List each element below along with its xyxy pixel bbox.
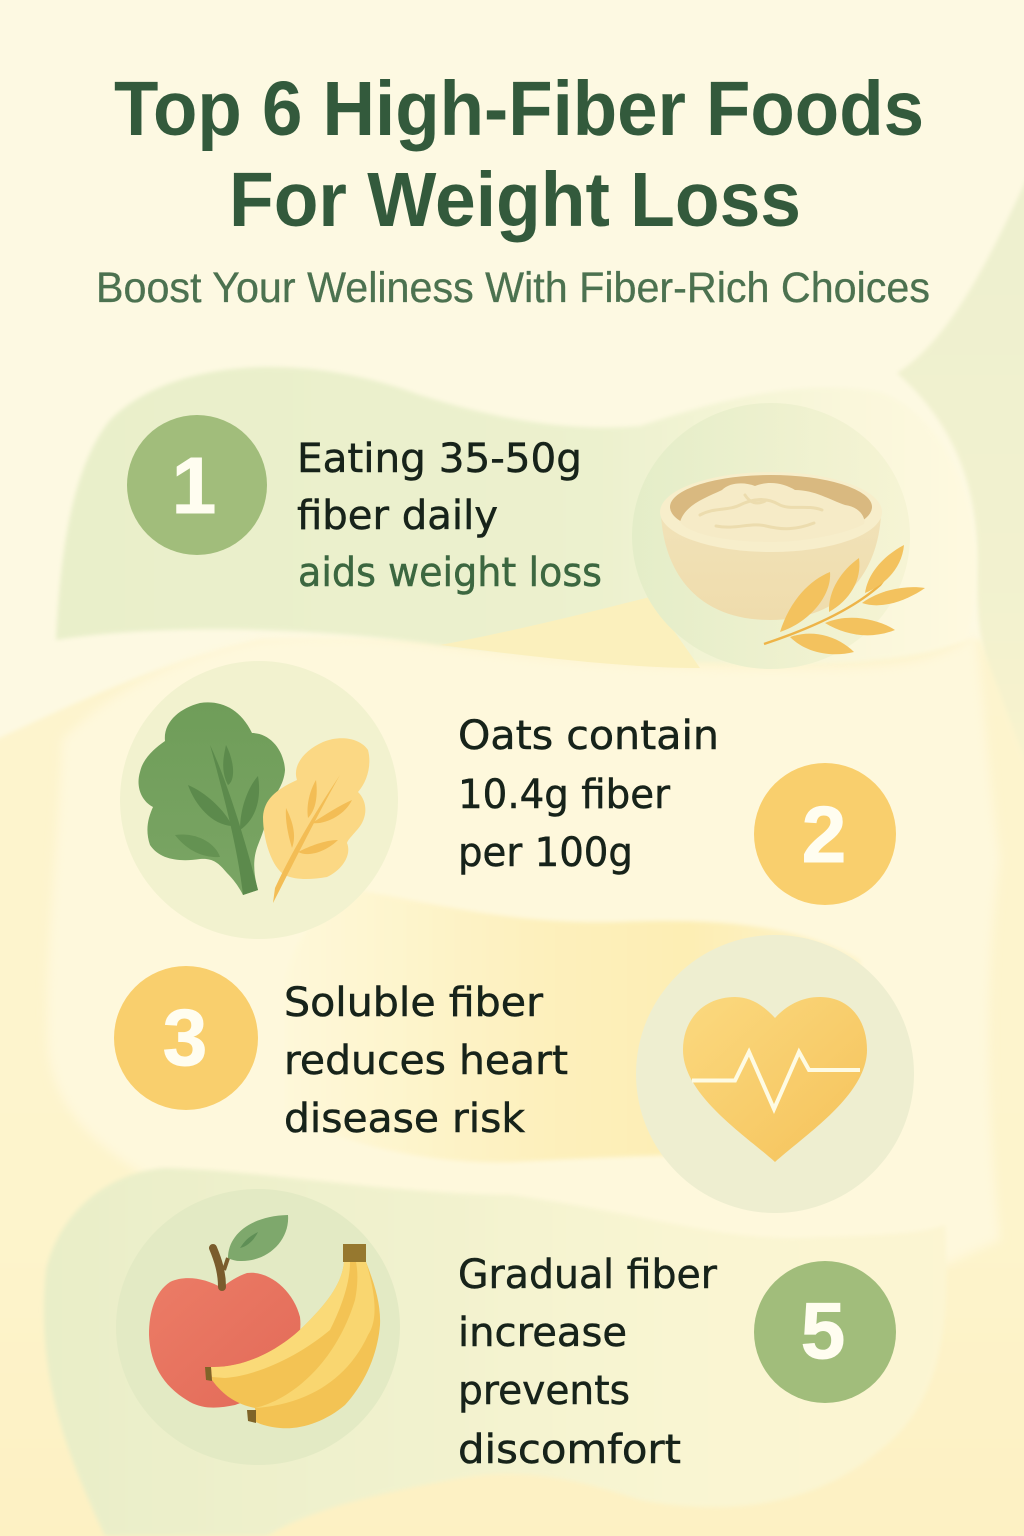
number badge 5 bbox=[754, 1261, 896, 1403]
number badge 3 bbox=[114, 966, 258, 1110]
text 1: aids weight loss bbox=[298, 550, 602, 596]
panel: row 4 backdrop bbox=[44, 1168, 946, 1536]
number badge 1 bbox=[127, 415, 267, 555]
title bbox=[114, 66, 924, 243]
icon: oat bowl with wheat bbox=[632, 403, 925, 669]
text 1: Eating 35-50g bbox=[297, 436, 582, 482]
number badge 2: 2 bbox=[802, 790, 846, 879]
text 5 bbox=[458, 1252, 718, 1473]
text 1: fiber daily bbox=[297, 493, 498, 539]
item 2 bbox=[120, 661, 896, 939]
text 1 bbox=[297, 436, 602, 596]
text 5: Gradual fiber bbox=[458, 1252, 718, 1298]
item 5 bbox=[116, 1189, 896, 1473]
number badge 2 bbox=[754, 763, 896, 905]
panel: row 1 backdrop bbox=[56, 367, 976, 664]
text 2 bbox=[458, 713, 719, 876]
text 3: reduces heart bbox=[284, 1038, 568, 1084]
icon: heart with pulse bbox=[636, 935, 914, 1213]
title: For Weight Loss bbox=[229, 157, 801, 243]
text 5: discomfort bbox=[458, 1427, 681, 1473]
text 2: Oats contain bbox=[458, 713, 719, 759]
item 1 bbox=[127, 403, 925, 669]
text 3: Soluble fiber bbox=[284, 980, 544, 1026]
number badge 3: 3 bbox=[163, 993, 207, 1082]
text 2: 10.4g fiber bbox=[458, 772, 671, 818]
text 5: prevents bbox=[458, 1368, 630, 1414]
text 3 bbox=[284, 980, 568, 1142]
icon: leafy greens bbox=[120, 661, 398, 939]
subtitle: Boost Your Weliness With Fiber-Rich Choices bbox=[96, 264, 930, 312]
panel: row 3 band bbox=[285, 891, 880, 1162]
icon: apple and banana bbox=[116, 1189, 400, 1465]
text 2: per 100g bbox=[458, 830, 633, 876]
text 3: disease risk bbox=[284, 1096, 526, 1142]
text 5: increase bbox=[458, 1310, 627, 1356]
number badge 1: 1 bbox=[172, 441, 216, 530]
number badge 5: 5 bbox=[801, 1286, 845, 1375]
item 3 bbox=[114, 935, 914, 1213]
panel: row 1 yellow accent bbox=[440, 597, 700, 668]
title: Top 6 High-Fiber Foods bbox=[114, 66, 924, 152]
